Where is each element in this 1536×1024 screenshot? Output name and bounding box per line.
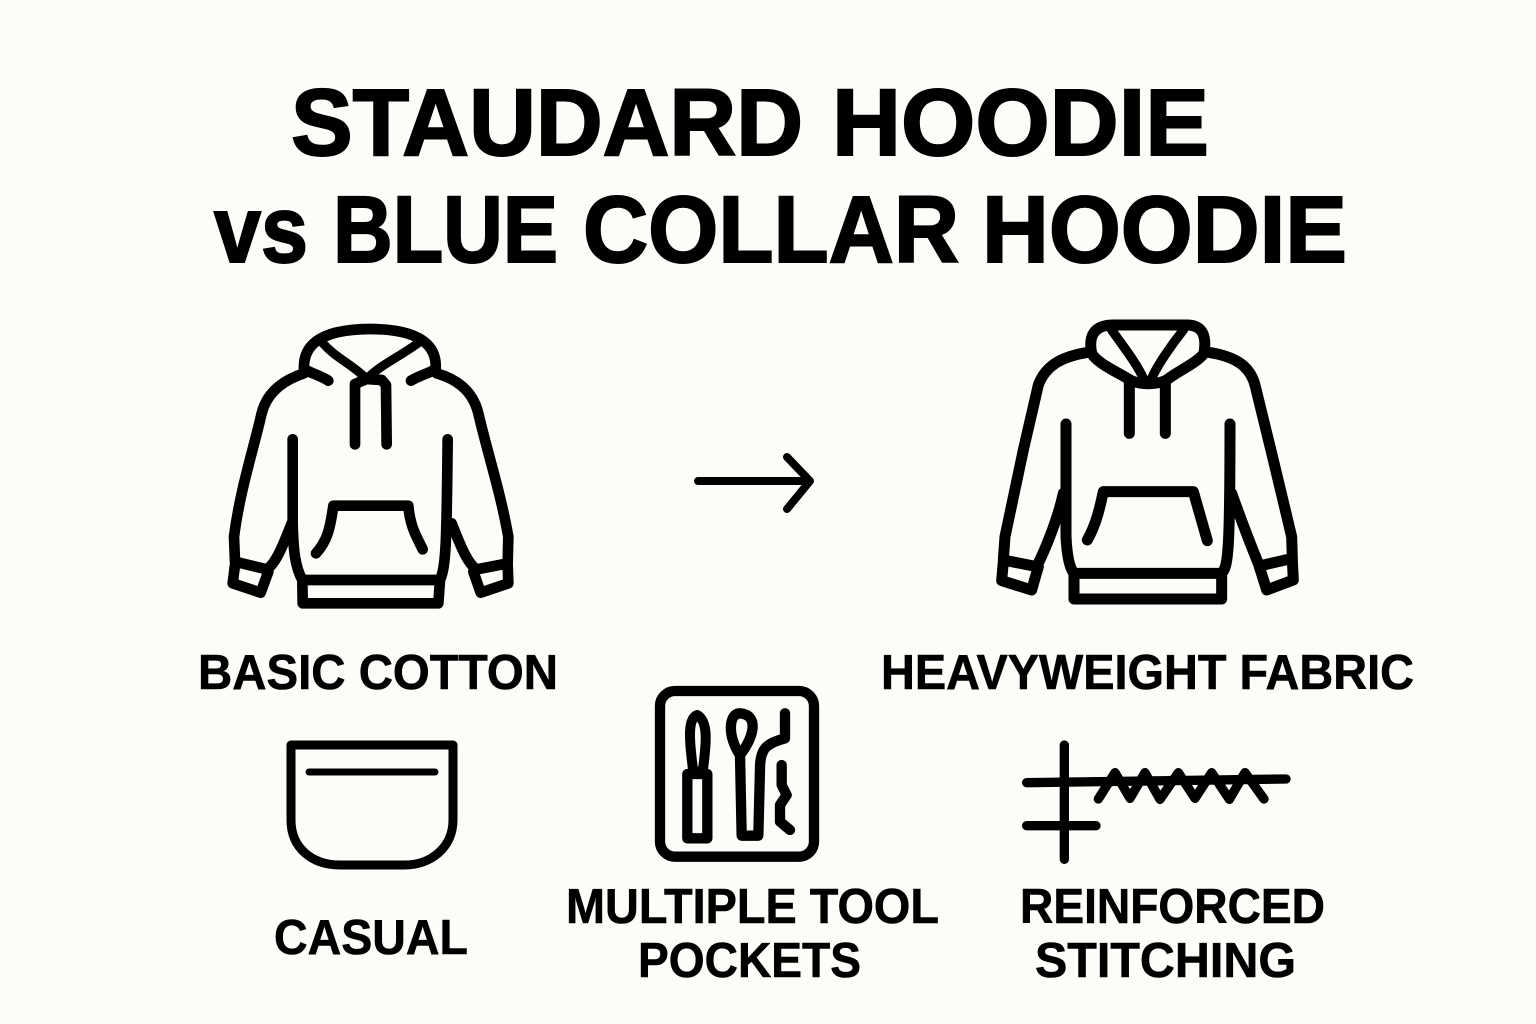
icon: reinforced stitching <box>1027 745 1286 859</box>
label: multiple tool pockets <box>566 880 939 988</box>
icon: multiple tool pockets <box>660 691 814 857</box>
title: STAUDARD <box>291 70 803 176</box>
title: HOODIE <box>982 177 1347 283</box>
icon: blue collar hoodie <box>1002 325 1293 599</box>
label: reinforced stitching: STITCHING <box>1035 934 1296 988</box>
label: heavyweight fabric: HEAVYWEIGHT FABRIC <box>881 646 1414 700</box>
label: basic cotton: BASIC COTTON <box>198 646 558 700</box>
label: reinforced stitching: REINFORCED <box>1020 880 1325 934</box>
title: COLLAR <box>583 177 959 283</box>
icon: standard hoodie <box>233 329 508 603</box>
label: multiple tool pockets: POCKETS <box>638 934 861 988</box>
icon: casual pocket <box>291 745 453 865</box>
title: HOODIE <box>832 70 1209 176</box>
title <box>214 70 1347 283</box>
label: multiple tool pockets: MULTIPLE TOOL <box>566 880 939 934</box>
arrow <box>698 457 810 509</box>
label: reinforced stitching <box>1020 880 1325 988</box>
title: vs <box>214 177 308 283</box>
title: BLUE <box>333 177 558 283</box>
label: casual: CASUAL <box>274 911 468 965</box>
